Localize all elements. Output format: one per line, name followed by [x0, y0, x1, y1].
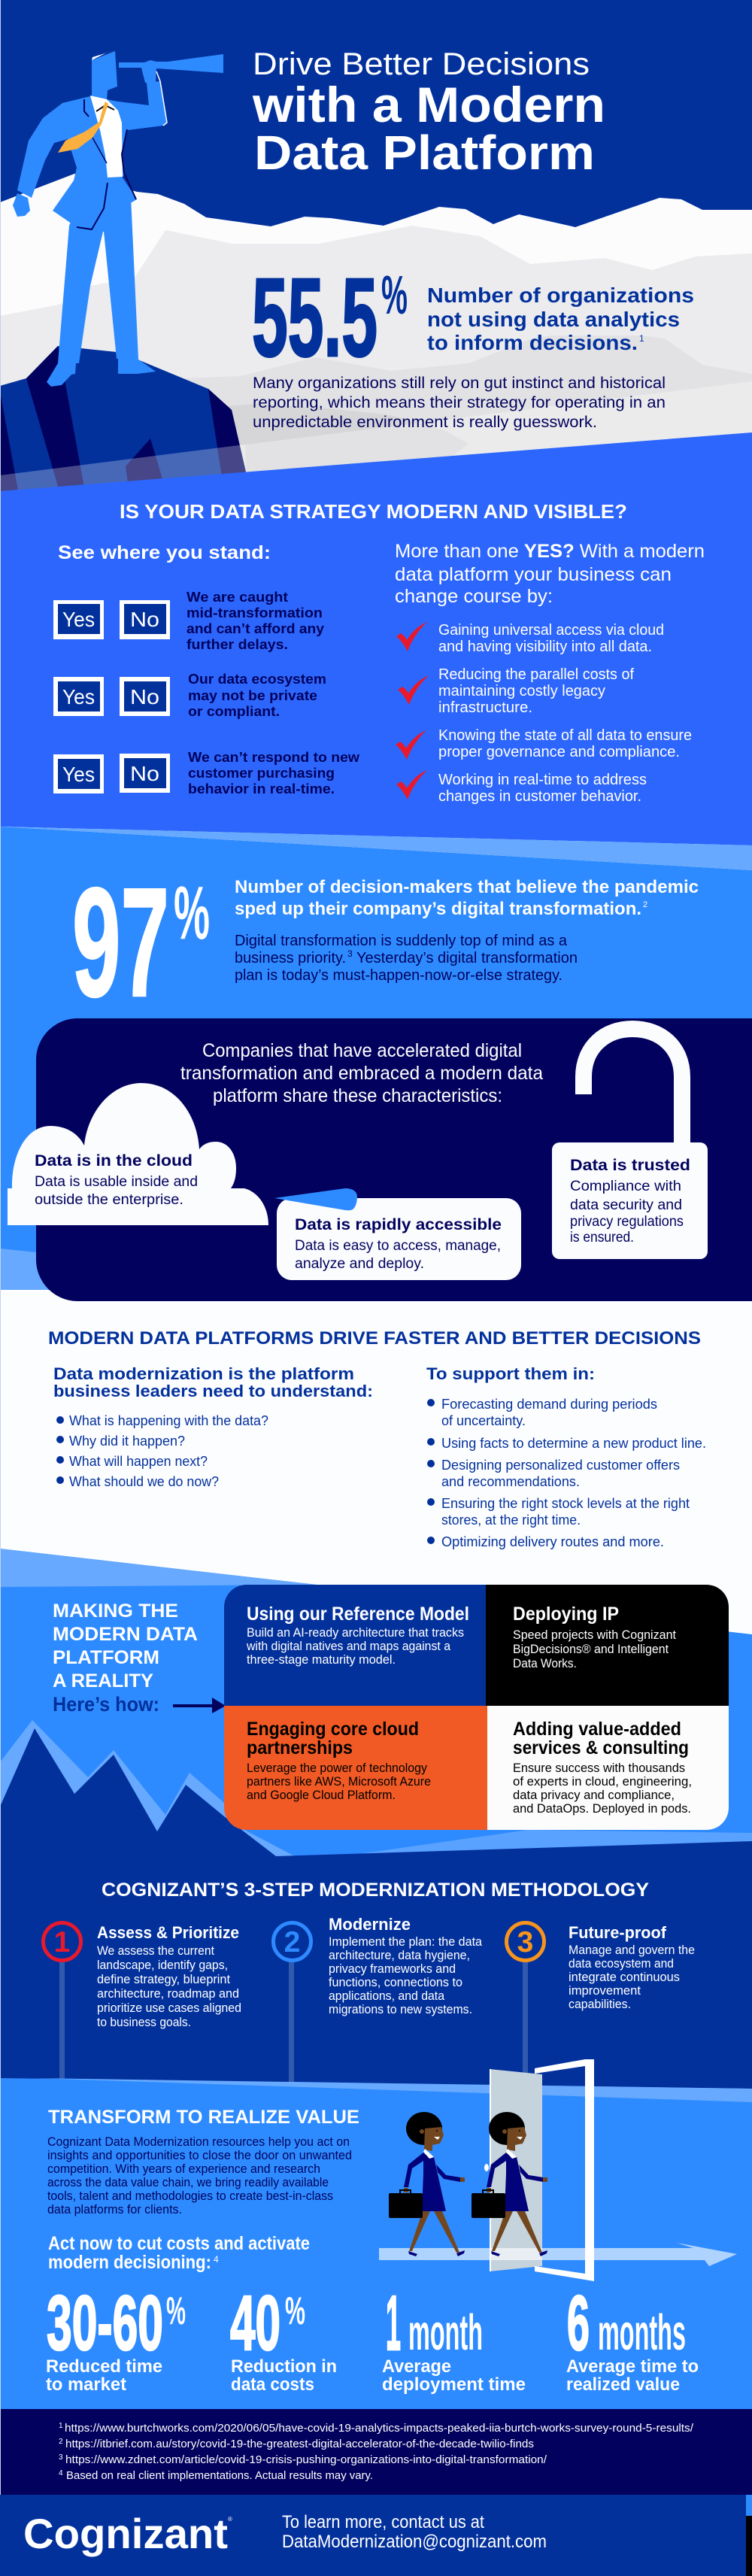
stat: 97%: Number of decision-makers that believe the pandemic: [235, 877, 699, 897]
step 1: assess and prioritize: landscape, identify gaps,: [97, 1958, 228, 1972]
stat: 97%: sped up their company’s digital transformation.: [235, 899, 641, 919]
question row 3: behavior in real-time.: [188, 781, 335, 796]
question row 3: Yes: [62, 763, 95, 786]
panel: four-quadrant cards: data privacy and compliance,: [513, 1788, 675, 1802]
question row 2: or compliant.: [188, 704, 280, 719]
stat: reduced time to market: to market: [46, 2374, 126, 2395]
footer: Cognizant: [23, 2510, 228, 2557]
step 3: future-proof: data ecosystem and: [569, 1956, 674, 1971]
step 3: future-proof: [507, 1922, 695, 2089]
footnotes: [0, 2409, 752, 2495]
question row 1: further delays.: [186, 637, 288, 652]
footer: [0, 2495, 752, 2576]
stat: reduced time to market: %: [166, 2289, 186, 2333]
stat: 55.5%: not using data analytics: [427, 308, 680, 331]
stat description: reporting, which means their strategy for operating in an: [253, 394, 666, 411]
footer: To learn more, contact us at: [282, 2512, 484, 2532]
stat: 97%: 2: [643, 900, 647, 909]
question row 1: and can’t afford any: [186, 621, 324, 636]
title: [252, 46, 605, 180]
column: support list: Using facts to determine a new product line.: [441, 1435, 706, 1451]
step 3: future-proof: 3: [517, 1926, 533, 1959]
heading: making the modern data platform a reality: Here’s how:: [53, 1693, 159, 1716]
step 1: assess and prioritize: Assess & Prioritize: [97, 1923, 239, 1942]
panel: transform to realize value background: [0, 2078, 752, 2409]
text: data modernization resources: Cognizant Data Modernization resources help you act on: [47, 2135, 350, 2149]
panel: four-quadrant cards: Using our Reference Model: [247, 1604, 469, 1625]
stat: 97%: Yesterday’s digital transformation: [356, 950, 578, 966]
card: trusted with padlock icon: Data is trusted: [570, 1157, 690, 1174]
panel: four-quadrant cards: Data Works.: [513, 1656, 577, 1670]
icon: cloud card: [8, 1083, 268, 1225]
column: support list: stores, at the right time.: [441, 1512, 581, 1528]
footnotes: https://www.burtchworks.com/2020/06/05/have-covid-19-analytics-impacts-peaked-iia-burtch-works-survey-round-5-results/: [65, 2422, 694, 2435]
footer: ®: [228, 2516, 232, 2523]
panel: four-quadrant cards: Speed projects with Cognizant: [513, 1628, 676, 1642]
step 2: modernize: [274, 1915, 483, 2089]
card: trusted with padlock icon: privacy regulations: [570, 1214, 684, 1230]
question row 1: mid-transformation: [186, 605, 323, 620]
step 2: modernize: applications, and data: [329, 1989, 445, 2003]
stat: reduction in data costs: 40: [230, 2280, 280, 2366]
panel: characteristics: [36, 1018, 752, 1301]
subheading: see where you stand: See where you stand:: [58, 542, 271, 563]
stat: average deployment time: month: [408, 2304, 483, 2361]
column: support list: [426, 1364, 706, 1549]
text: data modernization resources: [47, 2135, 352, 2216]
panel: four-quadrant cards: Deploying IP: [513, 1604, 619, 1625]
step 2: modernize: privacy frameworks and: [329, 1962, 456, 1976]
text: data modernization resources: data platforms for clients.: [47, 2202, 182, 2216]
stat: 55.5%: Number of organizations: [427, 284, 694, 307]
card: trusted with padlock icon: Compliance with: [570, 1179, 681, 1194]
rock under the man: [0, 346, 247, 496]
panel: four-quadrant cards: partners like AWS, Microsoft Azure: [247, 1774, 431, 1789]
column: questions for business leaders: Data modernization is the platform: [53, 1364, 354, 1383]
heading: making the modern data platform a reality: A REALITY: [53, 1670, 153, 1692]
column: support list: Forecasting demand during periods: [441, 1396, 657, 1412]
step 2: modernize: Modernize: [329, 1915, 411, 1934]
step 1: assess and prioritize: [44, 1922, 241, 2089]
stat: reduction in data costs: [230, 2280, 337, 2395]
step 3: future-proof: Future-proof: [569, 1923, 667, 1942]
icon: cloud card: Data is in the cloud: [35, 1152, 193, 1170]
panel: four-quadrant cards: Engaging core cloud: [247, 1719, 419, 1740]
stat: reduced time to market: 30-60: [47, 2280, 163, 2366]
stat description: Many organizations still rely on gut instinct and historical: [253, 375, 666, 392]
stat: average time to realized value: realized value: [566, 2374, 680, 2395]
question row 1: Yes: [62, 608, 95, 631]
card: trusted with padlock icon: data security and: [570, 1197, 682, 1213]
step 3: future-proof: Manage and govern the: [569, 1943, 695, 1957]
question row 3: [53, 750, 360, 796]
question row 2: No: [130, 685, 159, 708]
woman outside the door: [389, 2112, 465, 2256]
question row 3: customer purchasing: [188, 766, 335, 781]
column: questions for business leaders: What should we do now?: [69, 1473, 219, 1489]
stat: 55.5%: 1: [639, 333, 644, 344]
step 1: assess and prioritize: 1: [54, 1926, 70, 1959]
column: support list: of uncertainty.: [441, 1412, 526, 1428]
step 1: assess and prioritize: prioritize use cases aligned: [97, 2001, 241, 2015]
stat: 97%: [72, 856, 699, 1029]
stat: reduced time to market: Reduced time: [46, 2356, 162, 2377]
panel: four-quadrant cards: Ensure success with thousands: [513, 1761, 685, 1775]
checklist: [396, 622, 692, 805]
step 2: modernize: 2: [284, 1926, 300, 1959]
panel: data strategy background: [0, 432, 752, 845]
step 2: modernize: migrations to new systems.: [329, 2002, 472, 2016]
stat: average time to realized value: [566, 2280, 699, 2395]
card: rapidly accessible with arrow icon: analyze and deploy.: [295, 1256, 424, 1272]
column: questions for business leaders: Why did it happen?: [69, 1433, 185, 1449]
text: data modernization resources: insights and opportunities to close the door on unwanted: [47, 2148, 352, 2162]
panel: four-quadrant cards: and Google Cloud Platform.: [247, 1788, 396, 1802]
stat: average time to realized value: Average time to: [566, 2356, 699, 2377]
heading: data strategy: IS YOUR DATA STRATEGY MODERN AND VISIBLE?: [120, 500, 627, 523]
stat: 97%: 3: [347, 948, 353, 959]
footnotes: 4: [59, 2469, 63, 2477]
panel: four-quadrant cards: [224, 1585, 729, 1830]
step 1: assess and prioritize: to business goals.: [97, 2015, 191, 2029]
title: Drive Better Decisions: [253, 46, 590, 81]
step 3: future-proof: capabilities.: [569, 1997, 631, 2011]
panel: four-quadrant cards: services & consulting: [513, 1737, 689, 1758]
panel: four-quadrant cards: Adding value-added: [513, 1719, 681, 1740]
text: data modernization resources: competition. With years of experience and research: [47, 2162, 320, 2176]
stat: reduction in data costs: Reduction in: [231, 2356, 337, 2377]
panel: four-quadrant cards: Build an AI-ready architecture that tracks: [247, 1625, 464, 1640]
stat: 55.5%: to inform decisions.: [427, 331, 638, 354]
panel: characteristics: transformation and embraced a modern data: [180, 1063, 543, 1084]
text: more than one yes: change course by:: [395, 586, 553, 607]
heading: transform to realize value: TRANSFORM TO REALIZE VALUE: [48, 2107, 359, 2128]
step 2: modernize: architecture, data hygiene,: [329, 1948, 470, 1962]
stat: 55.5%: %: [381, 265, 408, 326]
panel: four-quadrant cards: of experts in cloud, engineering,: [513, 1774, 692, 1789]
stat: 55.5%: 55.5: [252, 256, 378, 380]
card: rapidly accessible with arrow icon: Data is easy to access, manage,: [295, 1238, 501, 1254]
stat description: [253, 375, 666, 431]
card: rapidly accessible with arrow icon: Data is rapidly accessible: [295, 1216, 502, 1233]
stat: 97%: business priority.: [235, 950, 346, 966]
panel: characteristics: Companies that have accelerated digital: [202, 1040, 522, 1061]
question row 2: Our data ecosystem: [188, 672, 326, 687]
stat: 97%: plan is today’s must-happen-now-or-else strategy.: [235, 967, 562, 984]
column: support list: Ensuring the right stock levels at the right: [441, 1495, 690, 1511]
checklist: infrastructure.: [438, 699, 532, 716]
text: more than one yes: data platform your business can: [395, 564, 672, 585]
stat: average deployment time: deployment time: [382, 2374, 526, 2395]
checklist: Reducing the parallel costs of: [438, 666, 634, 683]
checklist: Gaining universal access via cloud: [438, 622, 664, 639]
footnotes: Based on real client implementations. Actual results may vary.: [66, 2469, 373, 2482]
step 2: modernize: functions, connections to: [329, 1975, 462, 1989]
panel: four-quadrant cards: and DataOps. Deployed in pods.: [513, 1801, 691, 1816]
checklist: Working in real-time to address: [438, 772, 647, 788]
card: trusted with padlock icon: [552, 1029, 708, 1259]
step 1: assess and prioritize: We assess the current: [97, 1943, 214, 1958]
arrow: here's how: [173, 1698, 226, 1713]
panel: 97 percent background: [0, 827, 752, 1651]
column: support list: Designing personalized customer offers: [441, 1457, 680, 1473]
stat: 97%: Digital transformation is suddenly top of mind as a: [235, 933, 568, 949]
text: data modernization resources: tools, talent and methodologies to create best-in-class: [47, 2189, 333, 2203]
panel: four-quadrant cards: BigDecisions® and Intelligent: [513, 1642, 669, 1656]
panel: four-quadrant cards: with digital natives and maps against a: [246, 1639, 451, 1653]
stat: average deployment time: Average: [382, 2356, 451, 2377]
text: data modernization resources: across the data value chain, we bring readily available: [47, 2175, 329, 2189]
step 1: assess and prioritize: architecture, roadmap and: [97, 1986, 239, 2001]
heading: 3-step methodology: COGNIZANT’S 3-STEP MODERNIZATION METHODOLOGY: [102, 1880, 649, 1901]
question row 3: No: [130, 762, 159, 785]
card: rapidly accessible with arrow icon: [274, 1188, 521, 1280]
checklist: Knowing the state of all data to ensure: [438, 727, 692, 744]
icon: open door with arrow and walking women: [379, 2059, 737, 2281]
checklist: changes in customer behavior.: [438, 788, 641, 805]
column: support list: To support them in:: [426, 1364, 595, 1383]
checklist: and having visibility into all data.: [438, 639, 652, 655]
column: questions for business leaders: business leaders need to understand:: [53, 1382, 373, 1400]
text: act now: 4: [214, 2254, 219, 2265]
heading: making the modern data platform a reality: MAKING THE: [53, 1601, 178, 1622]
text: more than one yes: [395, 541, 705, 607]
column: questions for business leaders: What is happening with the data?: [69, 1412, 268, 1428]
heading: modern data platforms: MODERN DATA PLATFORMS DRIVE FASTER AND BETTER DECISIONS: [48, 1328, 701, 1349]
step 1: assess and prioritize: define strategy, blueprint: [97, 1972, 230, 1986]
panel: making it a reality background with mountains: [0, 1549, 752, 2098]
footer: DataModernization@cognizant.com: [282, 2532, 547, 2552]
footnotes: 1: [59, 2422, 63, 2430]
title: Data Platform: [254, 126, 595, 180]
stat: reduced time to market: [46, 2280, 186, 2395]
heading: making the modern data platform a reality: [53, 1601, 198, 1716]
heading: making the modern data platform a reality: PLATFORM: [53, 1647, 159, 1668]
card: trusted with padlock icon: is ensured.: [570, 1230, 634, 1246]
footnotes: 3: [59, 2453, 63, 2462]
icon: businessman with telescope: [13, 50, 223, 387]
question row 3: We can’t respond to new: [188, 750, 360, 765]
column: questions for business leaders: What will happen next?: [69, 1453, 208, 1469]
text: act now: [48, 2233, 310, 2273]
panel: four-quadrant cards: three-stage maturity model.: [247, 1652, 396, 1667]
panel: characteristics: platform share these characteristics:: [213, 1085, 502, 1106]
question row 2: may not be private: [188, 688, 317, 703]
stat: reduction in data costs: %: [285, 2289, 305, 2333]
question row 2: Yes: [62, 685, 95, 708]
column: questions for business leaders: [53, 1364, 373, 1489]
text: act now: Act now to cut costs and activate: [48, 2233, 310, 2254]
panel: four-quadrant cards: partnerships: [247, 1737, 353, 1758]
stat description: unpredictable environment is really guesswork.: [253, 414, 597, 431]
footnotes: https://www.zdnet.com/article/covid-19-crisis-pushing-organizations-into-digital-transformation/: [65, 2453, 547, 2466]
panel: four-quadrant cards: Leverage the power of technology: [247, 1761, 427, 1775]
stat: 97%: 97: [72, 856, 169, 1029]
stat: reduction in data costs: data costs: [231, 2374, 314, 2395]
stat: 55.5%: [252, 256, 694, 380]
column: support list: and recommendations.: [441, 1473, 580, 1489]
footnotes: 2: [59, 2438, 63, 2446]
stat: average deployment time: 1: [386, 2280, 401, 2366]
title: with a Modern: [252, 77, 605, 132]
text: act now: modern decisioning:: [48, 2252, 211, 2273]
stat: 97%: %: [174, 871, 210, 955]
icon: cloud card: outside the enterprise.: [35, 1192, 183, 1208]
step 3: future-proof: integrate continuous: [569, 1970, 680, 1984]
checklist: maintaining costly legacy: [438, 683, 605, 699]
question row 1: No: [130, 608, 159, 631]
text: more than one yes: More than one YES? With a modern: [395, 541, 705, 562]
stat: average time to realized value: 6: [567, 2280, 590, 2366]
step 3: future-proof: improvement: [569, 1983, 641, 1998]
icon: cloud card: Data is usable inside and: [35, 1174, 198, 1190]
step 2: modernize: Implement the plan: the data: [329, 1934, 483, 1949]
column: support list: Optimizing delivery routes and more.: [441, 1534, 664, 1549]
checklist: proper governance and compliance.: [438, 744, 680, 760]
stat: average deployment time: [382, 2280, 526, 2395]
footnotes: https://itbrief.com.au/story/covid-19-the-greatest-digital-accelerator-of-the-decade-twilio-finds: [65, 2438, 534, 2450]
woman passing through the door: [472, 2112, 547, 2256]
question row 1: [53, 590, 324, 652]
hero background with mountains: [0, 0, 752, 496]
question row 2: [53, 672, 326, 719]
heading: making the modern data platform a reality: MODERN DATA: [53, 1624, 198, 1645]
question row 1: We are caught: [186, 590, 288, 605]
